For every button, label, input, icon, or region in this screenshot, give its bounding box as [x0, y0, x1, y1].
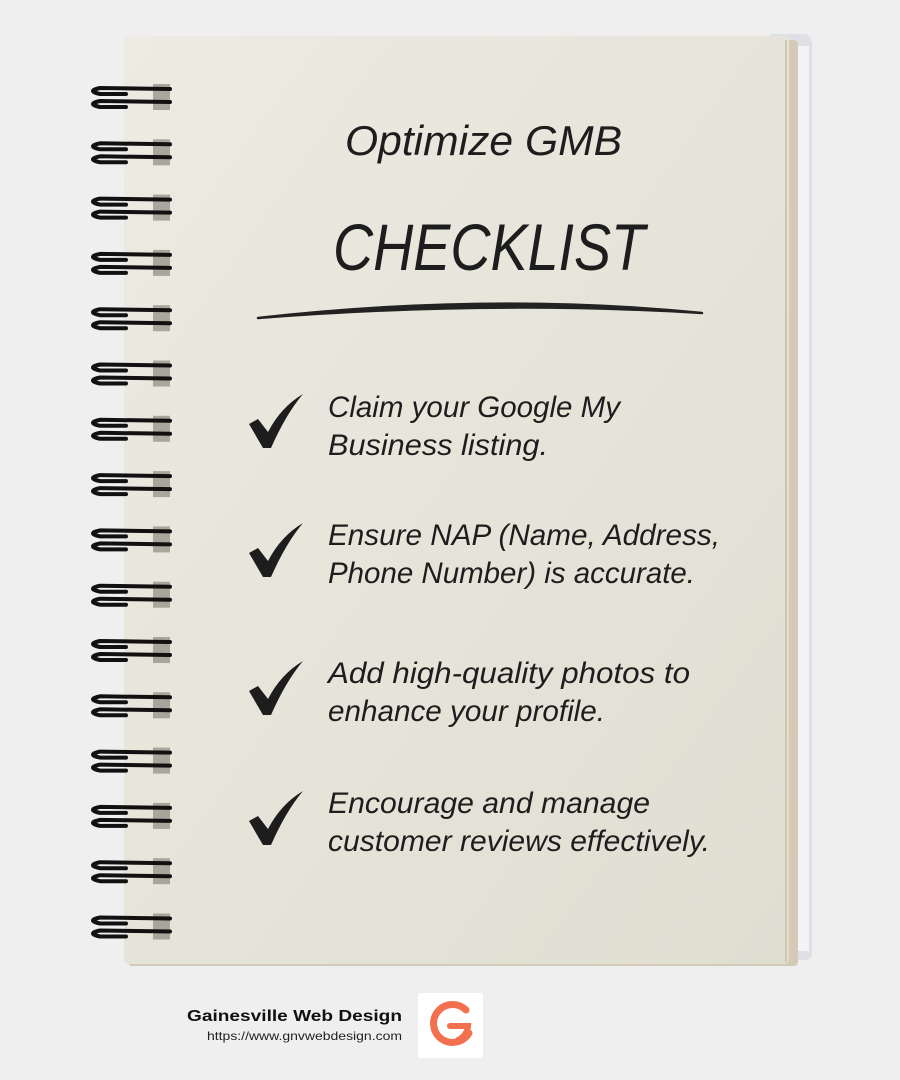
item 3	[249, 657, 698, 728]
icon: check	[249, 661, 303, 715]
logo	[418, 993, 483, 1058]
footer brand text: Gainesville Web Design	[187, 1008, 402, 1025]
item 3: enhance your profile.	[328, 695, 605, 728]
item 4: Encourage and manage	[328, 787, 650, 820]
item 2: Ensure NAP (Name, Address,	[328, 519, 720, 552]
item 1: Claim your Google My	[328, 391, 622, 424]
underline swoosh	[258, 304, 702, 318]
item 1: Business listing.	[328, 429, 548, 462]
icon: check	[249, 791, 303, 845]
item 1	[249, 391, 628, 462]
item 2	[249, 519, 728, 590]
notebook page	[124, 36, 798, 966]
notebook back cover	[770, 34, 812, 960]
item 2: Phone Number) is accurate.	[328, 557, 695, 590]
footer brand text	[187, 1008, 402, 1043]
spiral binding	[93, 84, 170, 940]
icon: check	[249, 394, 303, 448]
subtitle: Optimize GMB	[345, 117, 622, 164]
icon: check	[249, 523, 303, 577]
item 3: Add high-quality photos to	[326, 657, 690, 690]
item 4	[249, 787, 710, 858]
item 4: customer reviews effectively.	[328, 825, 710, 858]
footer brand text: https://www.gnvwebdesign.com	[207, 1029, 402, 1043]
title: CHECKLIST	[333, 210, 649, 284]
